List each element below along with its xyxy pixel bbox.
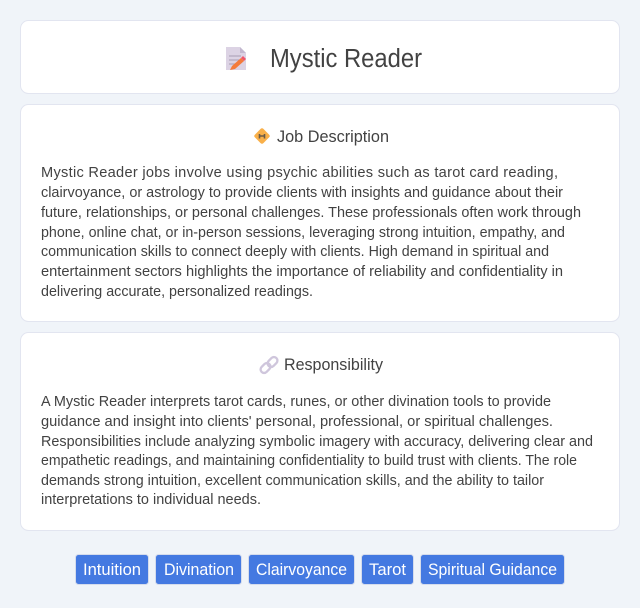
- job description text: clairvoyance, or astrology to provide clients with insights and guidance about their: [41, 184, 563, 201]
- title text: Mystic Reader: [270, 45, 422, 73]
- tag: tarot: [362, 554, 414, 584]
- responsibility text: Responsibilities include analyzing symbolic imagery with accuracy, delivering clear and: [41, 433, 593, 450]
- job description text: future, relationships, or personal challenges. These professionals often work through: [41, 204, 581, 221]
- responsibility text: empathetic readings, and maintaining confidentiality to build trust with clients. The role: [41, 452, 577, 469]
- tag: tarot: Tarot: [369, 560, 406, 579]
- job description text: delivering accurate, personalized readings.: [41, 283, 313, 300]
- icon: orange diamond: [254, 128, 270, 144]
- panel: job description: [20, 104, 620, 322]
- panel: responsibility: [20, 332, 620, 530]
- tag: intuition: [76, 554, 148, 584]
- icon: chain link: [259, 356, 279, 374]
- tag: clairvoyance: Clairvoyance: [256, 560, 347, 579]
- responsibility text: guidance and insight into clients' personal, professional, or spiritual challenges.: [41, 413, 553, 430]
- icon: document with pencil: [226, 47, 246, 70]
- tag: divination: Divination: [164, 560, 234, 579]
- tag: spiritual guidance: Spiritual Guidance: [428, 560, 557, 579]
- tag: clairvoyance: [248, 554, 354, 584]
- panel: title: [20, 20, 620, 94]
- tag: intuition: Intuition: [83, 560, 141, 579]
- tag: divination: [156, 554, 242, 584]
- job description text: Mystic Reader jobs involve using psychic abilities such as tarot card reading,: [41, 165, 558, 181]
- tag: spiritual guidance: [420, 554, 564, 584]
- job description text: [41, 165, 581, 300]
- job description text: communication skills to connect deeply with clients. High demand in spiritual and: [41, 243, 549, 260]
- job description text: phone, online chat, or in-person sessions, leveraging strong intuition, empathy, and: [41, 224, 565, 241]
- heading: responsibility: Responsibility: [284, 356, 384, 374]
- responsibility text: demands strong intuition, excellent communication skills, and the ability to tailor: [41, 472, 544, 489]
- job description text: entertainment sectors highlights the importance of reliability and confidentiality in: [41, 263, 563, 280]
- heading: job description: Job Description: [277, 128, 389, 146]
- responsibility text: interpretations to individual needs.: [41, 491, 261, 508]
- responsibility text: A Mystic Reader interprets tarot cards, runes, or other divination tools to provide: [41, 393, 551, 410]
- tags: [76, 554, 564, 584]
- responsibility text: [41, 393, 593, 508]
